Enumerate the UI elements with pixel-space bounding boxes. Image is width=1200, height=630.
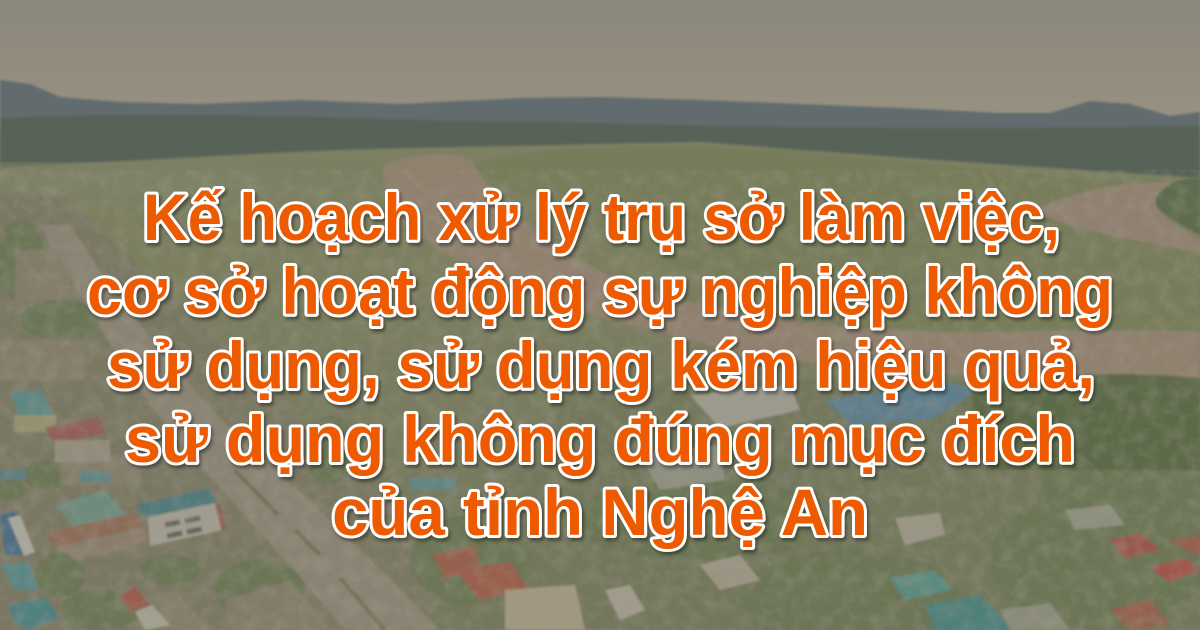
far mountains [0, 80, 1200, 185]
sky [0, 0, 1200, 130]
near forested hills [0, 114, 1200, 185]
buildings left: walls and roofs [10, 390, 53, 420]
forested river bank [1148, 178, 1200, 235]
buildings right: roofs [432, 545, 480, 578]
town ground [0, 190, 560, 630]
title line 5: của tỉnh Nghệ An [332, 475, 868, 549]
title line 3: sử dụng, sử dụng kém hiệu quả, [107, 328, 1095, 402]
pale building by the river [690, 385, 800, 428]
soft haze on the left town [0, 164, 300, 196]
photo texture on the town and fields [0, 170, 1200, 630]
tree clusters [0, 220, 1200, 630]
title line 1: Kế hoạch xử lý trụ sở làm việc, [143, 180, 1060, 254]
dark trees near pond [970, 374, 1200, 470]
blue pond [825, 382, 975, 424]
main road [40, 225, 440, 630]
river [383, 154, 1200, 385]
title line 2: cơ sở hoạt động sự nghiệp không [87, 254, 1113, 328]
pale town blocks, left [0, 250, 330, 630]
title line 4: sử dụng không đúng mục đích [125, 402, 1075, 476]
green fields [0, 142, 1200, 630]
title [87, 180, 1113, 549]
